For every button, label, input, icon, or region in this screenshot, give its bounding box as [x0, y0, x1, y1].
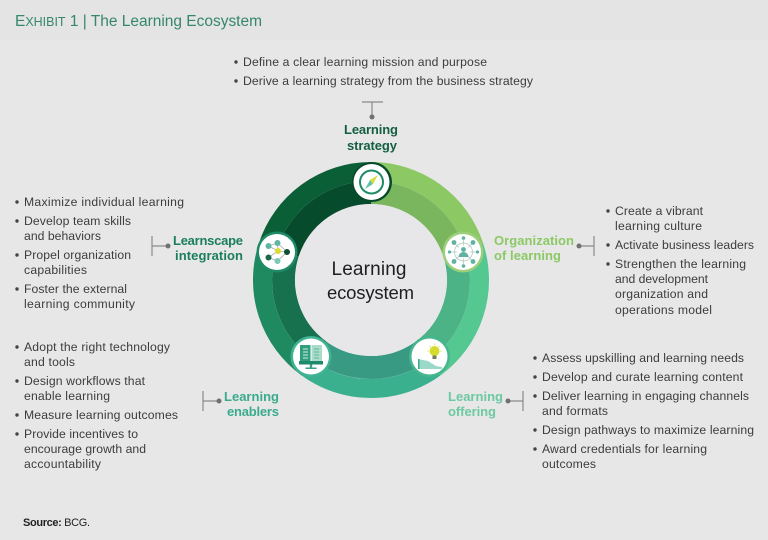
text block: learnscape integration — [15, 195, 184, 311]
panel: learning ecosystem ring — [262, 172, 480, 389]
heading: learnscape integration: integration — [175, 248, 243, 263]
text block: organization of learning: operations model — [615, 303, 712, 317]
ring segment: learning strategy — [268, 172, 371, 253]
heading: learning strategy: Learning — [344, 122, 398, 137]
text block: learning enablers: and tools — [24, 355, 75, 369]
heading: learning offering: Learning — [448, 389, 503, 404]
heading: organization of learning: Organization — [494, 233, 574, 248]
text block: learning strategy: Define a clear learning mission and purpose — [243, 55, 487, 69]
text block: learning offering: Design pathways to maximize learning — [542, 423, 754, 437]
text block: learnscape integration: Foster the external — [24, 282, 127, 296]
text block: learnscape integration: Maximize individual learning — [24, 195, 184, 209]
icon: book on monitor — [290, 336, 332, 377]
text block: learning offering: outcomes — [542, 457, 596, 471]
text block: learning enablers: Provide incentives to — [24, 427, 138, 441]
connector: learnscape integration — [152, 236, 170, 256]
text block: learnscape integration: and behaviors — [24, 229, 101, 243]
text block: learning strategy: Derive a learning strategy from the business strategy — [243, 74, 534, 88]
text block: learning offering: Assess upskilling and learning needs — [542, 351, 744, 365]
text block: learning offering: Deliver learning in engaging channels — [542, 389, 749, 403]
connector: learning offering — [506, 391, 523, 411]
text block: learning enablers: accountability — [24, 457, 102, 471]
heading: learnscape integration — [173, 233, 243, 263]
center label: Learning — [332, 259, 406, 280]
text block: learning offering: Develop and curate learning content — [542, 370, 744, 384]
ring segment: learning enablers — [307, 351, 435, 389]
text block: organization of learning: Create a vibrant — [615, 204, 704, 218]
text block: learning strategy — [234, 55, 534, 88]
heading: learning offering — [448, 389, 503, 419]
center label — [295, 204, 447, 356]
heading: learning strategy: strategy — [347, 138, 398, 153]
text block: learning enablers: Measure learning outcomes — [24, 408, 178, 422]
text block: learning offering — [533, 351, 754, 471]
text block: learning enablers: Design workflows that — [24, 374, 146, 388]
text block: organization of learning: learning culture — [615, 219, 702, 233]
heading: learning enablers: Learning — [224, 389, 279, 404]
source note: Source: BCG. — [23, 517, 90, 529]
ring segment: learnscape integration — [262, 246, 320, 368]
title: EXHIBIT 1 | The Learning Ecosystem — [15, 13, 262, 30]
text block: learning offering: and formats — [542, 404, 608, 418]
icon: connected nodes — [256, 232, 298, 272]
connector: learning enablers — [203, 391, 222, 411]
text block: organization of learning: Strengthen the learning — [615, 257, 746, 271]
heading: learnscape integration: Learnscape — [173, 233, 243, 248]
text block: learnscape integration: learning community — [24, 297, 136, 311]
center label: ecosystem — [327, 282, 414, 303]
text block: learnscape integration: Develop team skills — [24, 214, 131, 228]
text block: learnscape integration: Propel organization — [24, 248, 131, 262]
text block: learning enablers: encourage growth and — [24, 442, 146, 456]
text block: organization of learning: and development — [615, 272, 709, 286]
heading: learning enablers: enablers — [227, 404, 279, 419]
icon: lightbulb and hand — [409, 336, 450, 377]
icon: compass — [352, 162, 392, 202]
text block: learning enablers: Adopt the right technology — [24, 340, 171, 354]
heading: learning offering: offering — [448, 404, 496, 419]
heading: learning enablers — [224, 389, 279, 419]
text block: learning enablers — [15, 340, 178, 471]
text block: learning offering: Award credentials for learning — [542, 442, 707, 456]
ring segment: organization of learning — [371, 172, 474, 253]
connector: learning strategy — [362, 102, 383, 120]
text block: learning enablers: enable learning — [24, 389, 110, 403]
text block: organization of learning — [606, 204, 754, 317]
heading: learning strategy — [344, 122, 398, 153]
connector: organization of learning — [576, 236, 594, 256]
heading: organization of learning: of learning — [494, 248, 561, 263]
icon: network person — [442, 232, 484, 272]
ring segment: learning offering — [422, 246, 480, 368]
heading: organization of learning — [494, 233, 574, 263]
text block: organization of learning: organization and — [615, 287, 708, 301]
text block: organization of learning: Activate business leaders — [615, 238, 754, 252]
text block: learnscape integration: capabilities — [24, 263, 87, 277]
